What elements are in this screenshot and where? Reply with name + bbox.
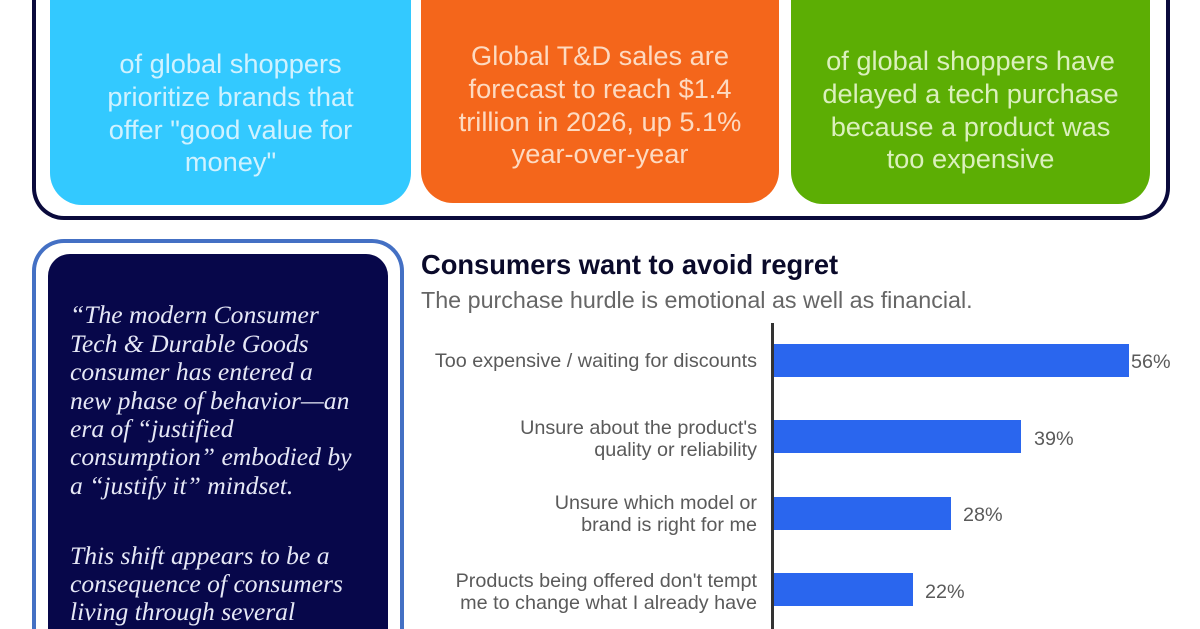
text: card one line two: prioritize brands that <box>107 81 354 112</box>
label: which model: brand is right for me <box>581 514 757 536</box>
label: too expensive: Too expensive / waiting for discounts <box>435 350 757 372</box>
panel: top stats frame <box>32 0 1170 220</box>
text: card two line four: year-over-year <box>512 138 688 169</box>
text: card one line four: money" <box>185 146 276 177</box>
label: not tempted: Products being offered don't tempt <box>456 570 757 592</box>
text: quote second paragraph <box>70 542 343 626</box>
heading: chart title: Consumers want to avoid regret <box>421 249 838 280</box>
quote line 6: consumption” embodied by <box>70 442 352 471</box>
text: chart subtitle: The purchase hurdle is emotional as well as financial. <box>421 287 973 313</box>
value: 28%: 28% <box>963 504 1003 526</box>
card: delayed tech purchase <box>791 0 1150 204</box>
quote line 7: a “justify it” mindset. <box>70 471 293 500</box>
text: card two line three: trillion in 2026, up 5.1% <box>459 106 741 137</box>
bar: 28 percent <box>774 497 951 530</box>
quote line 10: living through several <box>70 597 295 626</box>
bar: 22 percent <box>774 573 913 606</box>
label: which model: Unsure which model or <box>555 492 757 514</box>
quote line 3: consumer has entered a <box>70 357 313 386</box>
bar: 56 percent <box>774 344 1129 377</box>
bar: 39 percent <box>774 420 1021 453</box>
value: 56%: 56% <box>1131 351 1171 373</box>
text: card three line two: delayed a tech purchase <box>822 78 1119 109</box>
card: good value for money <box>50 0 411 205</box>
quote line 4: new phase of behavior—an <box>70 386 349 415</box>
text: card one line three: offer "good value for <box>109 114 352 145</box>
chart axis <box>771 323 774 629</box>
label: not tempted <box>456 570 757 614</box>
quote line 1: “The modern Consumer <box>70 300 319 329</box>
label: quality or reliability: quality or reliability <box>594 439 757 461</box>
quote line 2: Tech & Durable Goods <box>70 329 309 358</box>
label: quality or reliability <box>520 417 757 461</box>
label: quality or reliability: Unsure about the product's <box>520 417 757 439</box>
text: card three line four: too expensive <box>887 143 1054 174</box>
panel: quote <box>32 239 404 629</box>
text: card three line one: of global shoppers have <box>826 45 1115 76</box>
quote line 9: consequence of consumers <box>70 569 343 598</box>
value: 22%: 22% <box>925 581 965 603</box>
text: quote first paragraph <box>70 300 352 500</box>
text: card one line one: of global shoppers <box>119 48 342 79</box>
text: card three line three: because a product was <box>831 111 1110 142</box>
label: which model <box>555 492 757 536</box>
text: card two line one: Global T&D sales are <box>471 40 729 71</box>
value: 39%: 39% <box>1034 428 1074 450</box>
card: T&D sales forecast <box>421 0 779 203</box>
quote line 5: era of “justified <box>70 414 234 443</box>
text: card two line two: forecast to reach $1.4 <box>469 73 731 104</box>
label: not tempted: me to change what I already have <box>460 592 757 614</box>
